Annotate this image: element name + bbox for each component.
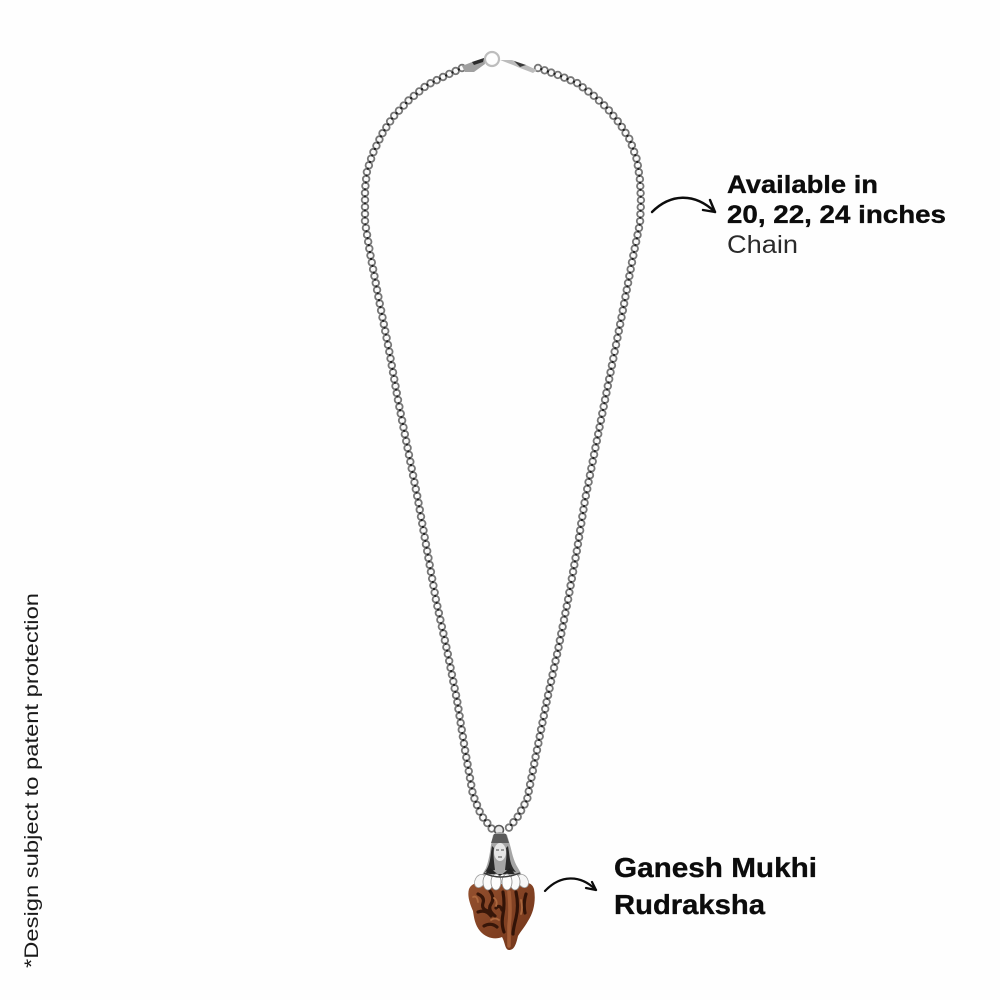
- callout: bead name: Ganesh Mukhi: [614, 852, 817, 883]
- pendant: rudraksha bead: [468, 883, 535, 950]
- callout: chain lengths: Available in: [727, 171, 878, 199]
- callout: bead name: [614, 852, 817, 920]
- arrow: to chain: [652, 198, 715, 212]
- chain: right strand: [507, 68, 641, 830]
- pendant: scalloped silver cap: [472, 872, 531, 890]
- necklace: silver chain with clasp and pendant: [365, 52, 641, 950]
- pendant: silver bail and deity figure: [482, 826, 522, 876]
- callout: chain lengths: [727, 171, 946, 259]
- callout: chain lengths: Chain: [727, 231, 798, 259]
- clasp: [462, 52, 537, 73]
- arrow: to rudraksha: [545, 878, 596, 891]
- chain: left strand: [365, 68, 492, 829]
- callout: chain lengths: 20, 22, 24 inches: [727, 201, 946, 229]
- callout: bead name: Rudraksha: [614, 889, 765, 920]
- footnote: patent disclaimer: *Design subject to patent protection: [21, 593, 43, 968]
